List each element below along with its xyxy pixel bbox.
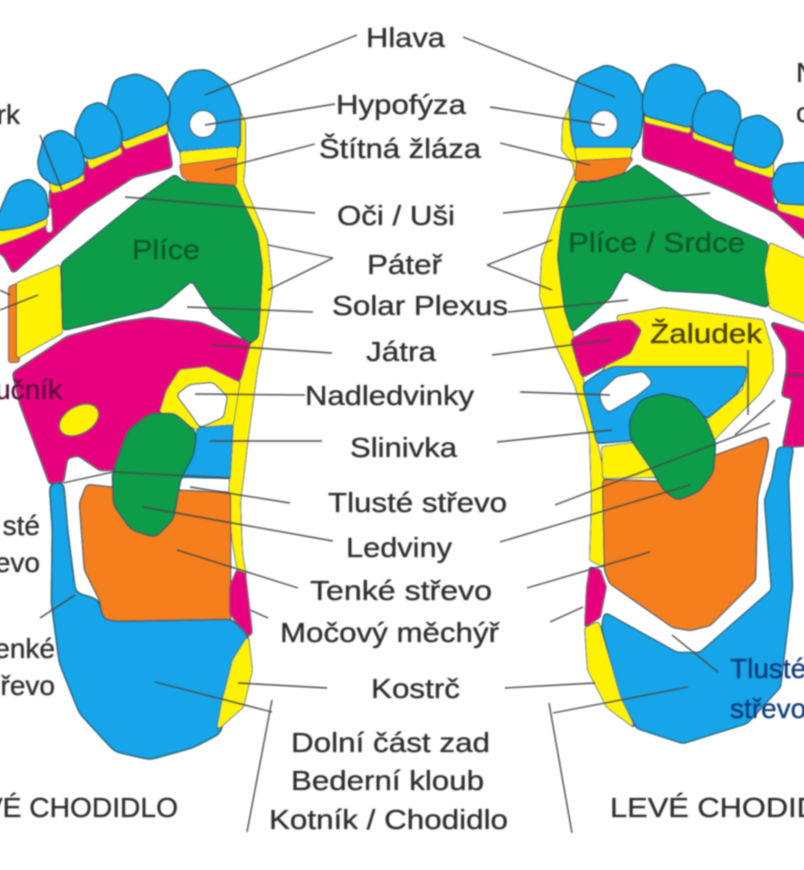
bladder <box>585 567 606 627</box>
labels: Hypofýza <box>336 89 466 120</box>
shoulder yellow <box>765 243 804 326</box>
neck band <box>180 147 237 166</box>
liver <box>13 318 250 484</box>
toe 3 <box>693 90 741 147</box>
kidney <box>113 414 196 537</box>
ball magenta <box>643 108 804 245</box>
toe 5 <box>771 162 804 205</box>
labels: Játra <box>366 336 436 367</box>
toe bands <box>118 115 168 149</box>
labels: Oči / Uši <box>337 200 455 231</box>
toe 2 <box>108 74 170 142</box>
right sole (left foot on page) <box>0 70 272 759</box>
toe 5 <box>0 179 49 231</box>
stomach yellow <box>600 308 773 442</box>
colon yellow <box>602 443 657 478</box>
small intestine <box>603 437 768 630</box>
coccyx <box>217 636 252 730</box>
left sole (right foot on page) <box>540 64 804 743</box>
bladder <box>230 570 252 637</box>
heel <box>602 447 793 743</box>
labels: Kotník / Chodidlo <box>269 804 508 835</box>
toe bands <box>645 105 690 133</box>
labels: Tlusté střevo <box>328 487 507 518</box>
labels: Kostrč <box>371 673 460 704</box>
labels: Páteř <box>367 249 443 280</box>
labels: Močový měchýř <box>280 617 500 648</box>
pituitary spot <box>591 111 617 137</box>
pancreas <box>177 425 233 478</box>
kidney <box>630 394 715 500</box>
thyroid <box>575 158 633 181</box>
shoulder yellow <box>17 265 62 358</box>
colon edge magenta <box>770 322 804 447</box>
labels: sté <box>3 510 40 541</box>
neck band <box>575 148 632 161</box>
labels: Žaludek <box>650 318 763 349</box>
small intestine <box>80 485 230 625</box>
gall bladder <box>54 398 104 442</box>
labels: Plíce / Srdce <box>568 227 745 258</box>
pituitary spot <box>190 111 216 137</box>
labels: Bederní kloub <box>291 765 484 796</box>
toe 2 <box>643 64 706 128</box>
labels: Štítná žláza <box>319 133 481 164</box>
spleen <box>571 320 641 377</box>
toe 4 <box>38 130 85 186</box>
labels: Solar Plexus <box>332 290 508 321</box>
toe 3 <box>75 102 122 160</box>
lungs <box>62 175 262 343</box>
white pocket <box>600 372 652 412</box>
ball magenta <box>0 122 172 273</box>
coccyx <box>585 622 635 728</box>
labels: Dolní část zad <box>291 727 490 758</box>
heel <box>50 482 249 759</box>
adrenal white <box>177 383 227 427</box>
labels: střevo <box>730 693 804 724</box>
big toe head <box>570 65 644 150</box>
adrenal yellow <box>160 367 240 430</box>
labels: Hlava <box>366 22 445 53</box>
labels: Slinivka <box>350 432 457 463</box>
labels: Nadledvinky <box>305 380 474 411</box>
labels: Tlusté <box>730 653 804 684</box>
pancreas blue <box>583 367 747 443</box>
sliver between toes <box>45 208 52 232</box>
shoulder orange <box>9 283 19 362</box>
labels: řevo <box>1 670 55 701</box>
labels: Tenké střevo <box>310 575 492 606</box>
lungs and heart <box>558 165 768 332</box>
labels: Ledviny <box>346 532 452 563</box>
spine band <box>225 100 272 577</box>
big toe: head <box>168 70 240 157</box>
labels: Plíce <box>132 234 200 265</box>
toe 4 <box>733 115 783 168</box>
thyroid <box>180 158 236 187</box>
spine band <box>540 100 604 567</box>
